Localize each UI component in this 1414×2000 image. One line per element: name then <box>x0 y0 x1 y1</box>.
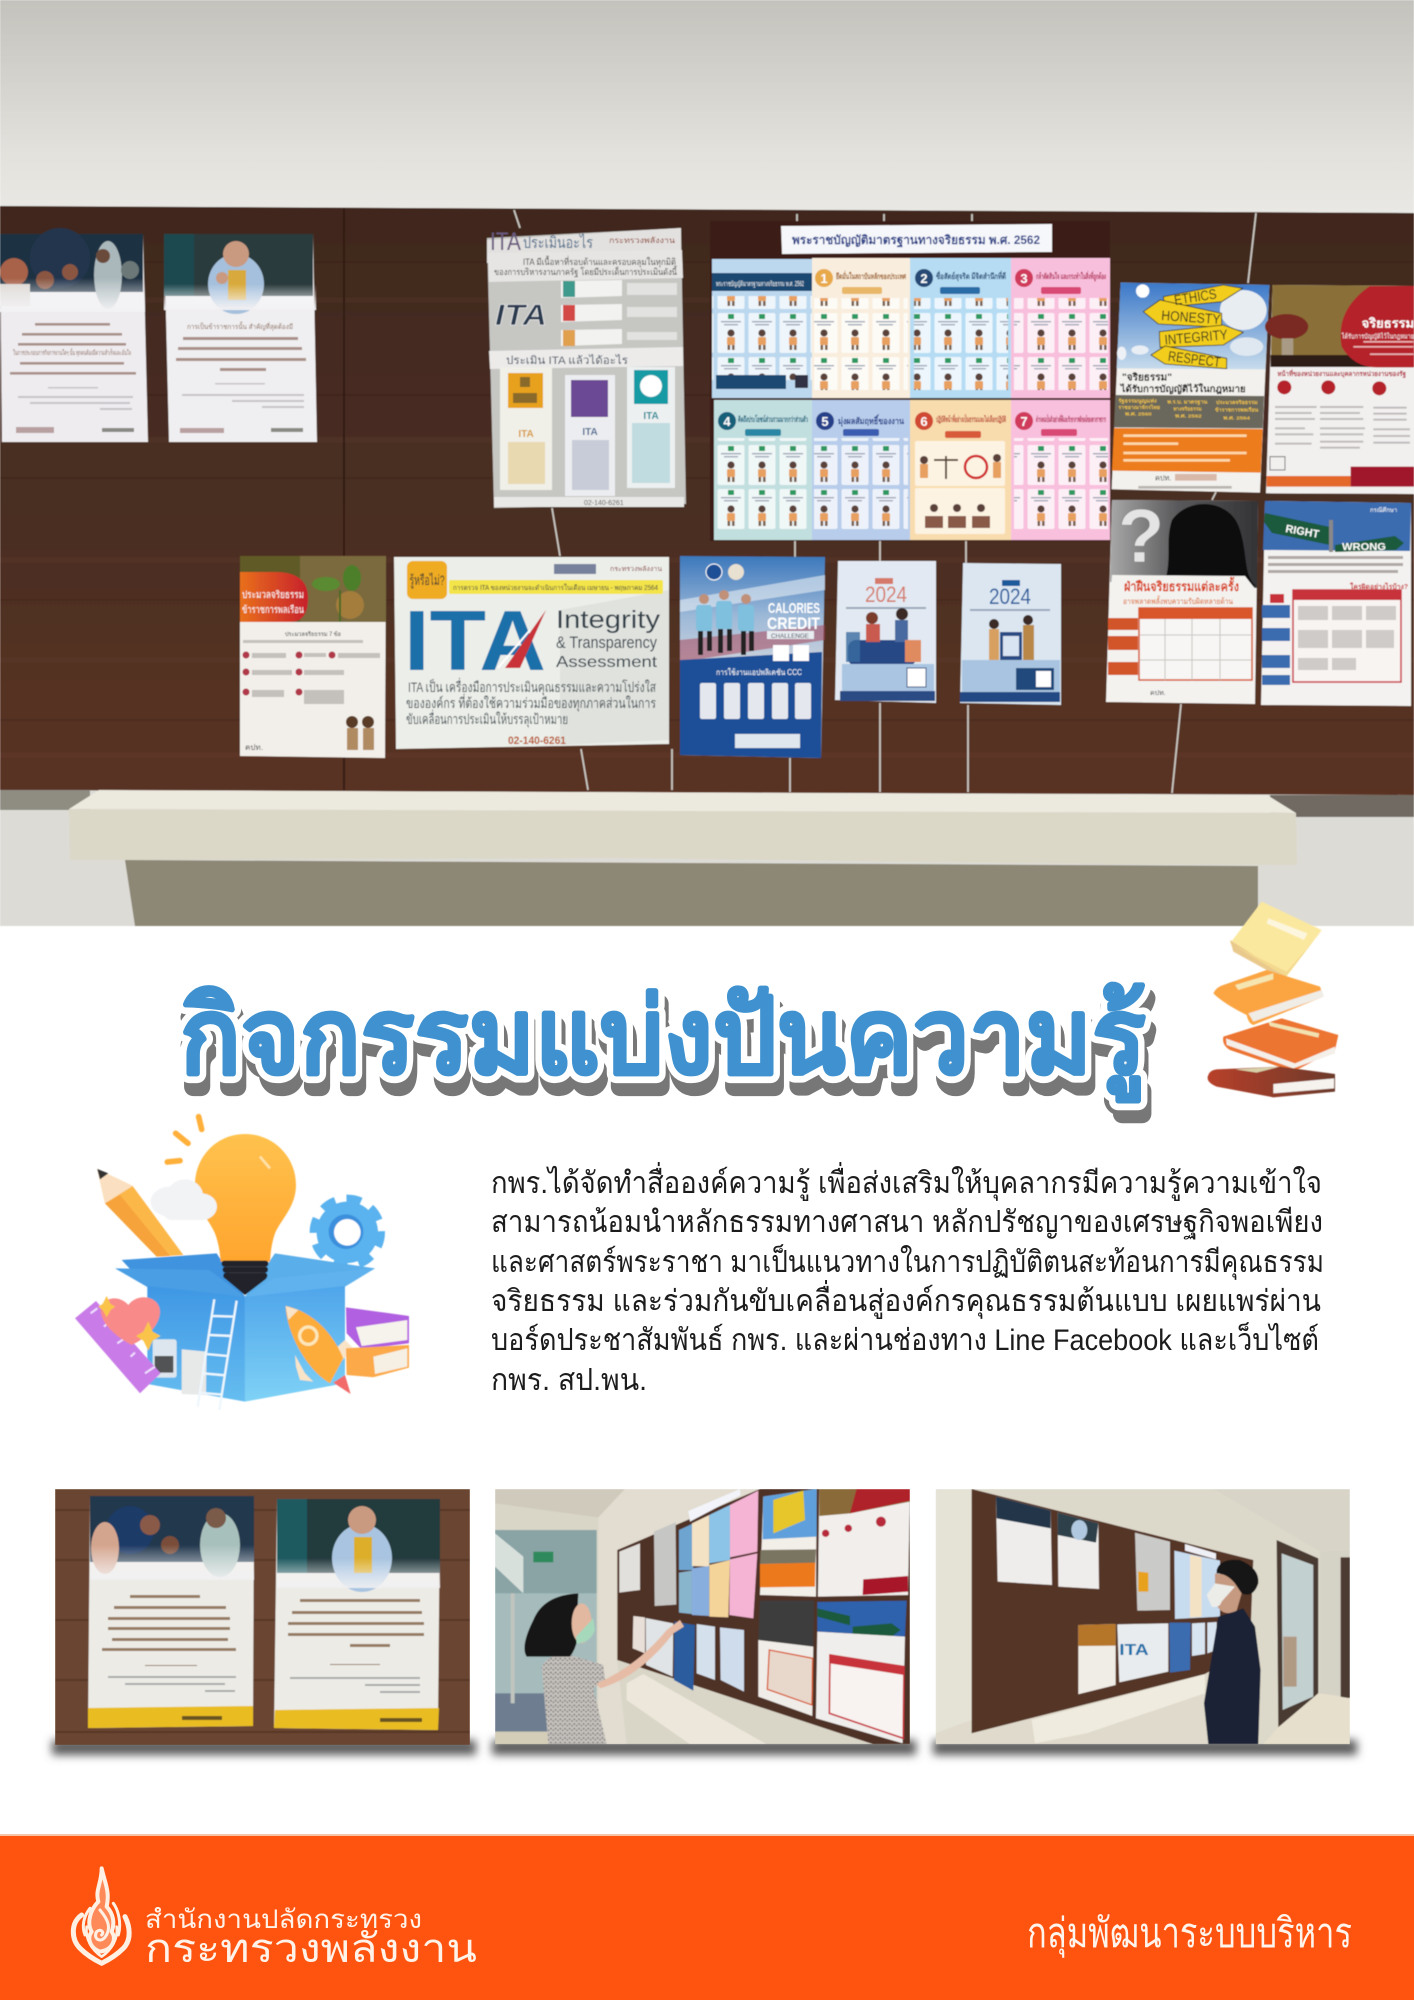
panel 1: ยึดมั่นในสถาบันหลักของประเทศ <box>836 270 907 281</box>
bulb socket <box>222 1261 268 1295</box>
board: Ethical Standards Act 2562: ปฏิบัติหน้าที่อย่างเป็นธรรมและไม่เลือกปฏิบัติ <box>936 413 1006 424</box>
poster: Ethics signpost: ราชอาณาจักรไทย <box>1118 404 1160 411</box>
box back flaps <box>122 1253 375 1297</box>
ministry name: สำนักงานปลัดกระทรวง <box>145 1904 422 1934</box>
poster: Ethics signpost: ETHICS <box>1173 285 1218 308</box>
poster: ITA Integrity & Transparency Assessment: Integrity <box>556 606 661 634</box>
panel 4: 4 <box>723 414 731 429</box>
poster: RIGHT WRONG <box>1261 501 1411 706</box>
poster: Ethics signpost: ได้รับการบัญญัติไว้ในกฎหมาย <box>1120 383 1246 395</box>
body text: จริยธรรม และร่วมกันขับเคลื่อนสู่องค์กรคุณธรรมต้นแบบ เผยแพร่ผ่าน <box>491 1280 1321 1320</box>
poster: ITA Integrity & Transparency Assessment: กระทรวงพลังงาน <box>610 565 663 573</box>
body text: กพร.ได้จัดทำสื่อองค์ความรู้ เพื่อส่งเสริมให้บุคลากรมีความรู้ความเข้าใจ <box>491 1162 1322 1202</box>
poster: ITA ประเมินอะไร: ประเมินอะไร <box>523 233 593 252</box>
poster: ITA 2024 officer <box>960 563 1061 705</box>
board title banner: พระราชบัญญัติมาตรฐานทางจริยธรรม พ.ศ. 2562 <box>792 233 1040 248</box>
title: กิจกรรมแบ่งปันความรู้ <box>180 978 1146 1103</box>
poster: ประมวลจริยธรรม <box>240 556 386 758</box>
panel 5: มุ่งผลสัมฤทธิ์ของงาน <box>838 414 905 427</box>
ladder <box>198 1299 237 1410</box>
body text <box>491 1162 1324 1397</box>
poster: ประมวลจริยธรรม: คปท. <box>245 743 263 752</box>
poster: Ethics signpost: ทางจริยธรรม <box>1173 405 1202 412</box>
poster: ฝ่าฝืนจริยธรรม: คปท. <box>1150 690 1166 697</box>
book red-orange <box>1223 1018 1338 1072</box>
poster: Calories Credit Challenge: CREDIT <box>767 614 821 633</box>
hero photo: notice board wall: ดำรงตนเป็นตัวอย่างที่ดีและรักษาภาพลักษณ์ของทางราชการ <box>1036 413 1106 424</box>
bulb <box>195 1134 296 1262</box>
ruler <box>75 1301 161 1393</box>
stars <box>98 1296 161 1351</box>
poster: RIGHT WRONG: กรณีศึกษา <box>1370 506 1397 514</box>
panel 4 <box>714 400 812 540</box>
idea sparks <box>167 1117 202 1162</box>
panel 1 <box>812 258 910 398</box>
poster: Calories Credit Challenge: การใช้งานแอปพลิเคชัน CCC <box>716 668 802 677</box>
poster: Ethics signpost: พ.ร.บ. มาตรฐาน <box>1167 399 1208 405</box>
ceiling <box>1213 1489 1350 1552</box>
poster: ฝ่าฝืนจริยธรรม: ฝ่าฝืนจริยธรรมแต่ละครั้ง <box>1124 576 1239 594</box>
poster: Ethics signpost: ประมวลจริยธรรม <box>1216 399 1258 406</box>
poster: ประมวลจริยธรรม: ประมวลจริยธรรม 7 ข้อ <box>285 631 341 638</box>
poster: Calories Credit Challenge: CALORIES <box>768 600 820 617</box>
body text: บอร์ดประชาสัมพันธ์ กพร. และผ่านช่องทาง Line Facebook และเว็บไซต์ <box>491 1321 1319 1357</box>
poster: ITA ประเมินอะไร: ITA <box>490 228 521 256</box>
runners <box>696 601 754 631</box>
poster: ITA Integrity & Transparency Assessment: รู้หรือไม่? <box>410 572 445 589</box>
poster: Ethics signpost: พ.ศ. 2560 <box>1125 412 1152 418</box>
poster: Calories Credit Challenge <box>680 556 825 758</box>
panel 3: 3 <box>1020 271 1028 286</box>
book orange <box>1213 970 1324 1025</box>
photo 3: man viewing posters <box>936 1489 1350 1744</box>
poster: royal quote Rama X <box>164 234 317 442</box>
pencil <box>97 1169 183 1257</box>
board: Ethical Standards Act 2562 <box>710 221 1110 541</box>
icon: ministry flame logo <box>73 1868 129 1963</box>
poster: ITA Integrity & Transparency Assessment: 02-140-6261 <box>508 735 566 747</box>
poster: RIGHT WRONG: ใครผิดอย่างไรบ้าง? <box>1350 582 1408 591</box>
poster: ฝ่าฝืนจริยธรรม <box>1106 494 1258 704</box>
poster: จริยธรรม red: จริยธรรม <box>1362 316 1414 330</box>
white shelf <box>69 790 1297 865</box>
book yellow <box>1230 902 1322 977</box>
panel 7 <box>1011 400 1110 540</box>
poster: ITA ประเมินอะไร: กระทรวงพลังงาน <box>609 236 676 245</box>
poster: Ethics signpost: INTEGRITY <box>1164 326 1229 348</box>
ITA logo: ITA <box>404 594 546 689</box>
poster: ITA Integrity & Transparency Assessment: Assessment <box>556 654 658 671</box>
poster: RIGHT WRONG: RIGHT <box>1284 523 1320 541</box>
posters <box>619 1489 910 1743</box>
shelf shadow and sides <box>0 790 1414 926</box>
man <box>1204 1560 1261 1744</box>
poster: จริยธรรม red <box>1265 285 1414 494</box>
panel 3: กล้าตัดสินใจ และกระทำในสิ่งที่ถูกต้อง <box>1036 270 1106 282</box>
poster: ประมวลจริยธรรม: ข้าราชการพลเรือน <box>242 604 304 616</box>
photo 2: woman pointing at posters <box>495 1489 910 1744</box>
poster: Ethics signpost: พ.ศ. 2562 <box>1175 414 1202 420</box>
poster: ITA 2024 family <box>835 561 936 703</box>
poster: Ethics signpost: คปท. <box>1155 474 1171 483</box>
poster: ITA ประเมินอะไร: 02-140-6261 <box>584 500 624 507</box>
box front <box>115 1268 375 1402</box>
poster: ITA ประเมินอะไร: ITA <box>495 299 547 332</box>
title: กิจกรรมแบ่งปันความรู้ <box>184 991 1150 1116</box>
rocket <box>286 1306 353 1394</box>
panel 3 <box>1011 258 1110 398</box>
poster: ITA Integrity & Transparency Assessment: ขับเคลื่อนการประเมินให้บรรลุเป้าหมาย <box>406 710 568 728</box>
glass door <box>495 1530 597 1744</box>
photo 1: royal quote posters <box>55 1489 470 1745</box>
box labels <box>153 1339 207 1395</box>
ministry name <box>145 1904 477 1971</box>
panel 6 <box>910 400 1011 540</box>
three benefit cards: ITA <box>643 411 659 422</box>
poster: Ethics signpost: "จริยธรรม" <box>1122 372 1172 384</box>
wall right <box>598 1489 763 1744</box>
panel 2: 2 <box>920 271 928 286</box>
wood <box>617 1489 910 1744</box>
title: กิจกรรมแบ่งปันความรู้ <box>180 978 1146 1103</box>
three benefit cards: ITA <box>518 429 534 440</box>
woman <box>524 1593 684 1744</box>
posters <box>996 1497 1220 1694</box>
three benefit cards: ITA <box>582 427 598 438</box>
right poster <box>274 1499 440 1730</box>
poster: ประมวลจริยธรรม: ประมวลจริยธรรม <box>242 590 304 601</box>
ministry name: กระทรวงพลังงาน <box>145 1927 477 1971</box>
book brown <box>1208 1067 1335 1097</box>
hero photo: notice board wall <box>0 0 1414 926</box>
poster: ITA Integrity & Transparency Assessment: ขององค์กร ที่ต้องใช้ความร่วมมือของทุกภาคส่วนในการ <box>406 694 656 712</box>
hanging cables <box>514 210 1256 793</box>
panel 5 <box>812 400 910 540</box>
panel 6: 6 <box>920 414 928 429</box>
signs <box>1143 285 1243 369</box>
panel 5: 5 <box>821 414 829 429</box>
heart <box>101 1297 160 1345</box>
panel 2 <box>910 258 1011 398</box>
poster: ITA 2024 family: 2024 <box>865 582 907 607</box>
board title banner <box>781 224 1052 254</box>
quote text: ในการประกอบภารกิจการงานใดๆ นั้น ทุกคนต้องมีความสำเร็จและมั่นใจ <box>13 348 131 357</box>
left poster <box>88 1496 254 1728</box>
poster: ITA Integrity & Transparency Assessment: ITA เป็น เครื่องมือการประเมินคุณธรรมและความโปร่งใส <box>408 678 656 696</box>
poster: Ethics signpost: รัฐธรรมนูญแห่ง <box>1118 398 1157 406</box>
panel 2: ซื่อสัตย์สุจริต มีจิตสำนึกที่ดี <box>936 270 1006 282</box>
body text: สามารถน้อมนำหลักธรรมทางศาสนา หลักปรัชญาของเศรษฐกิจพอเพียง <box>491 1206 1323 1240</box>
three benefit cards <box>500 367 675 496</box>
shelf <box>1032 1674 1205 1743</box>
poster: RIGHT WRONG: WRONG <box>1342 542 1386 553</box>
panel 7: 7 <box>1020 414 1028 429</box>
posters: ITA <box>1119 1642 1149 1659</box>
poster: Ethics signpost: HONESTY <box>1161 307 1222 327</box>
poster: ITA Integrity & Transparency Assessment <box>394 557 669 749</box>
poster: royal quote Rama IX <box>0 228 148 442</box>
body text: กพร. สป.พน. <box>491 1364 647 1397</box>
footer bar <box>0 1834 1414 2000</box>
wood wall panel <box>0 206 1414 795</box>
poster: ITA Integrity & Transparency Assessment: & Transparency <box>556 633 657 652</box>
wood <box>972 1489 1253 1733</box>
panel 4: คิดถึงประโยชน์ส่วนรวมมากกว่าส่วนตัว <box>738 414 808 424</box>
poster: ITA ประเมินอะไร: ITA มีเนื้อหาที่รอบด้านและครอบคลุมในทุกมิติ <box>523 255 676 268</box>
books under rocket <box>346 1307 409 1377</box>
poster: Ethics signpost: RESPECT <box>1167 348 1222 370</box>
poster: ITA 2024 officer: 2024 <box>989 584 1031 609</box>
photo shadows <box>52 1740 1357 1755</box>
illustration: idea box with light bulb <box>75 1117 409 1410</box>
poster: Ethics signpost: ข้าราชการพลเรือน <box>1215 407 1259 414</box>
poster: Ethics signpost: พ.ศ. 2564 <box>1223 415 1250 421</box>
poster: ITA ประเมินอะไร <box>487 228 686 508</box>
door and corridor <box>1263 1540 1350 1744</box>
quote text: การเป็นข้าราชการนั้น สำคัญที่สุดต้องมี <box>187 320 293 331</box>
gear <box>314 1199 381 1266</box>
summary panel: พระราชบัญญัติมาตรฐานทางจริยธรรม พ.ศ. 2562 <box>716 280 804 288</box>
poster: จริยธรรม red: หน้าที่ของหน่วยงานและบุคลากรหน่วยงานของรัฐ <box>1277 368 1406 379</box>
shelf <box>627 1674 767 1744</box>
poster: ฝ่าฝืนจริยธรรม: ? <box>1118 494 1164 579</box>
poster: ITA ประเมินอะไร: ประเมิน ITA แล้วได้อะไร <box>506 354 628 367</box>
poster: Ethics signpost <box>1112 283 1269 493</box>
panel 1: 1 <box>820 271 828 286</box>
poster: ITA Integrity & Transparency Assessment: การตรวจ ITA ของหน่วยงานจะดำเนินการในเดือน เมษายน - พฤษภาคม 2564 <box>453 583 658 592</box>
poster: ฝ่าฝืนจริยธรรม: อาจพลาดพลั้งพบความรับผิดหลายด้าน <box>1123 595 1233 606</box>
summary panel <box>712 259 812 398</box>
icon: stack of books <box>1208 902 1338 1097</box>
poster: Calories Credit Challenge: CHALLENGE <box>771 634 809 640</box>
poster: ITA ประเมินอะไร: ของการบริหารงานภาครัฐ โดยมีประเด็นการประเมินดังนี้ <box>494 265 678 278</box>
cloud <box>151 1179 217 1220</box>
